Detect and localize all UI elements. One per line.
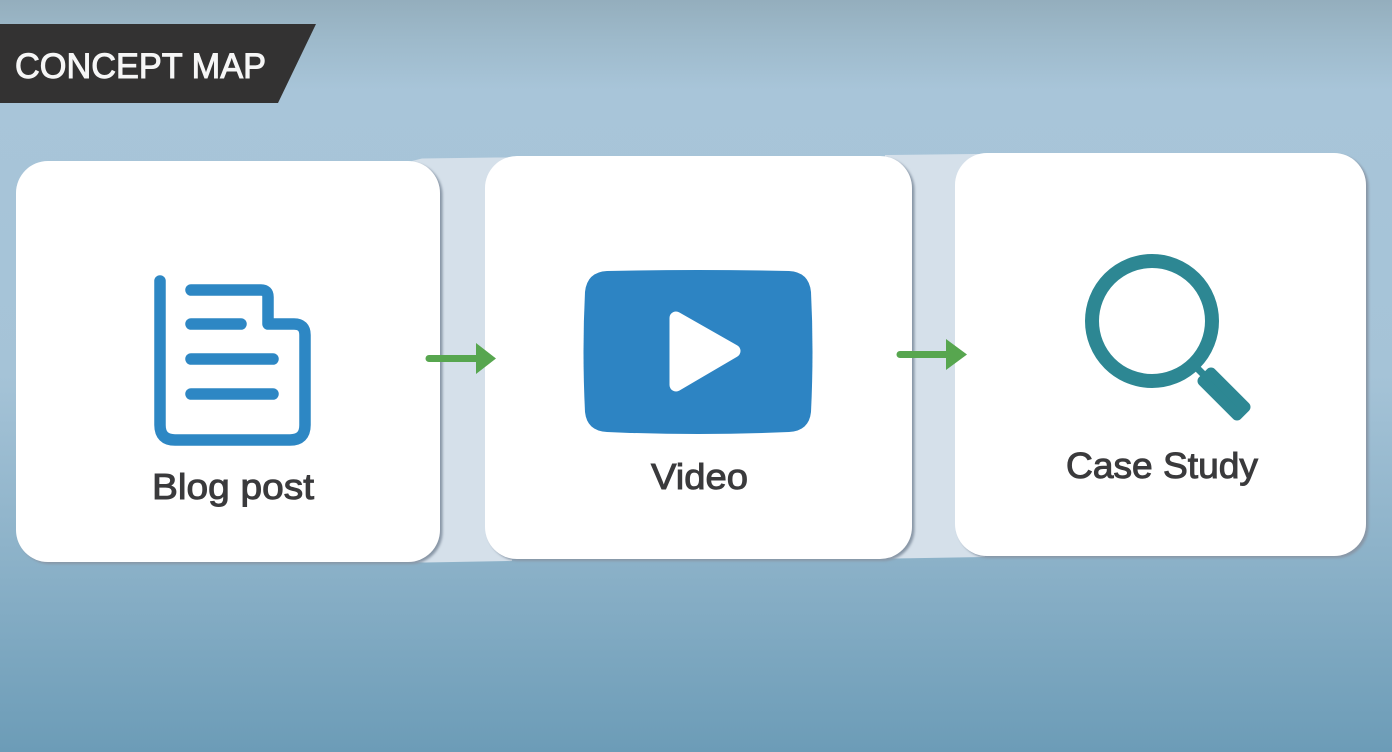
panel: case study: [955, 153, 1368, 558]
icon: magnifying glass: [1092, 261, 1245, 415]
icon: video play button: [584, 270, 812, 434]
label: blog post: Blog post: [152, 466, 314, 507]
panel: video: [485, 156, 914, 561]
icon: document: [160, 281, 305, 440]
connector band: first gap: [412, 158, 512, 562]
title text: CONCEPT MAP: [15, 47, 266, 86]
label: video: Video: [651, 456, 748, 497]
arrow: blog post to video: [429, 343, 496, 374]
connector band: second gap: [885, 154, 985, 558]
title banner: [0, 24, 316, 103]
label: case study: Case Study: [1066, 445, 1258, 486]
arrow: video to case study: [900, 339, 967, 370]
panel: blog post: [16, 161, 442, 564]
